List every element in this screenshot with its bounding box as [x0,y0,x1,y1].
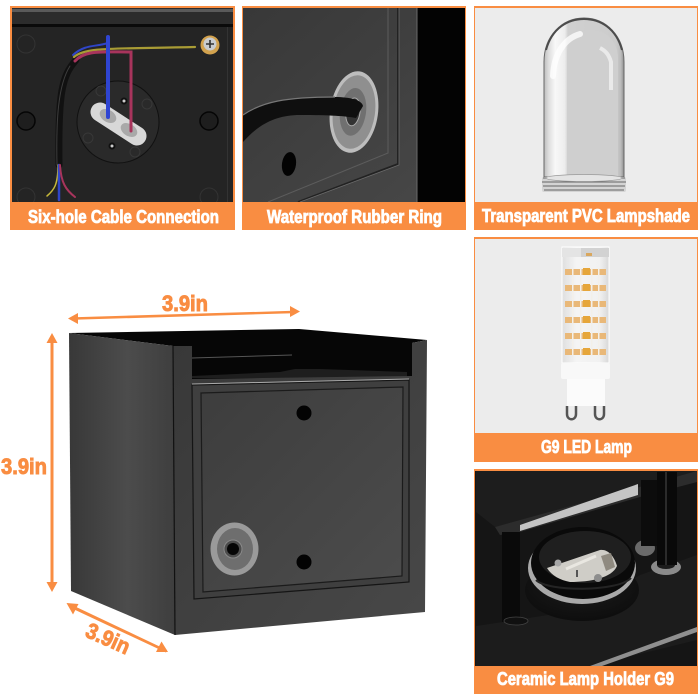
caption: G9 LED Lamp [541,437,632,457]
dimension label: top: 3.9in [162,291,208,316]
icon: mounting holes [17,35,218,206]
product: black cube wall light [69,329,427,635]
dimension label: depth: 3.9in [82,618,134,659]
arrow: height [46,333,58,592]
dimension label: height: 3.9in [1,454,47,479]
black cable [243,97,363,142]
recessed door panel [201,387,403,592]
left face [69,333,175,635]
panel: G9 LED lamp [474,237,698,462]
icon: G9 LED bulb [561,247,610,419]
icon: rubber grommet [210,522,258,576]
caption: Waterproof Rubber Ring [267,207,442,227]
icon: top screw hole [296,406,312,420]
right posts [635,472,681,575]
interior top opening [69,329,427,380]
panel: waterproof rubber ring [242,6,466,230]
door frame [192,380,409,599]
black cable and coloured wires [47,37,195,200]
arrow: depth [66,603,168,652]
panel: transparent PVC lampshade [474,6,698,230]
icon: screw hole [280,151,298,177]
panel: six-hole cable connection [10,6,235,230]
icon: bottom screw hole [296,554,312,570]
icon: rubber ring grommet [325,68,383,156]
front face [173,340,427,635]
caption: Six-hole Cable Connection [28,207,219,227]
arrow: top width [68,306,300,324]
icon: ground screw terminal [200,36,220,54]
round cable plate with slot [77,81,159,163]
left post [502,532,528,625]
panel: ceramic lamp holder G9 [474,469,698,694]
icon: ceramic lamp holder socket [525,527,639,621]
icon: glass dome [542,18,626,192]
